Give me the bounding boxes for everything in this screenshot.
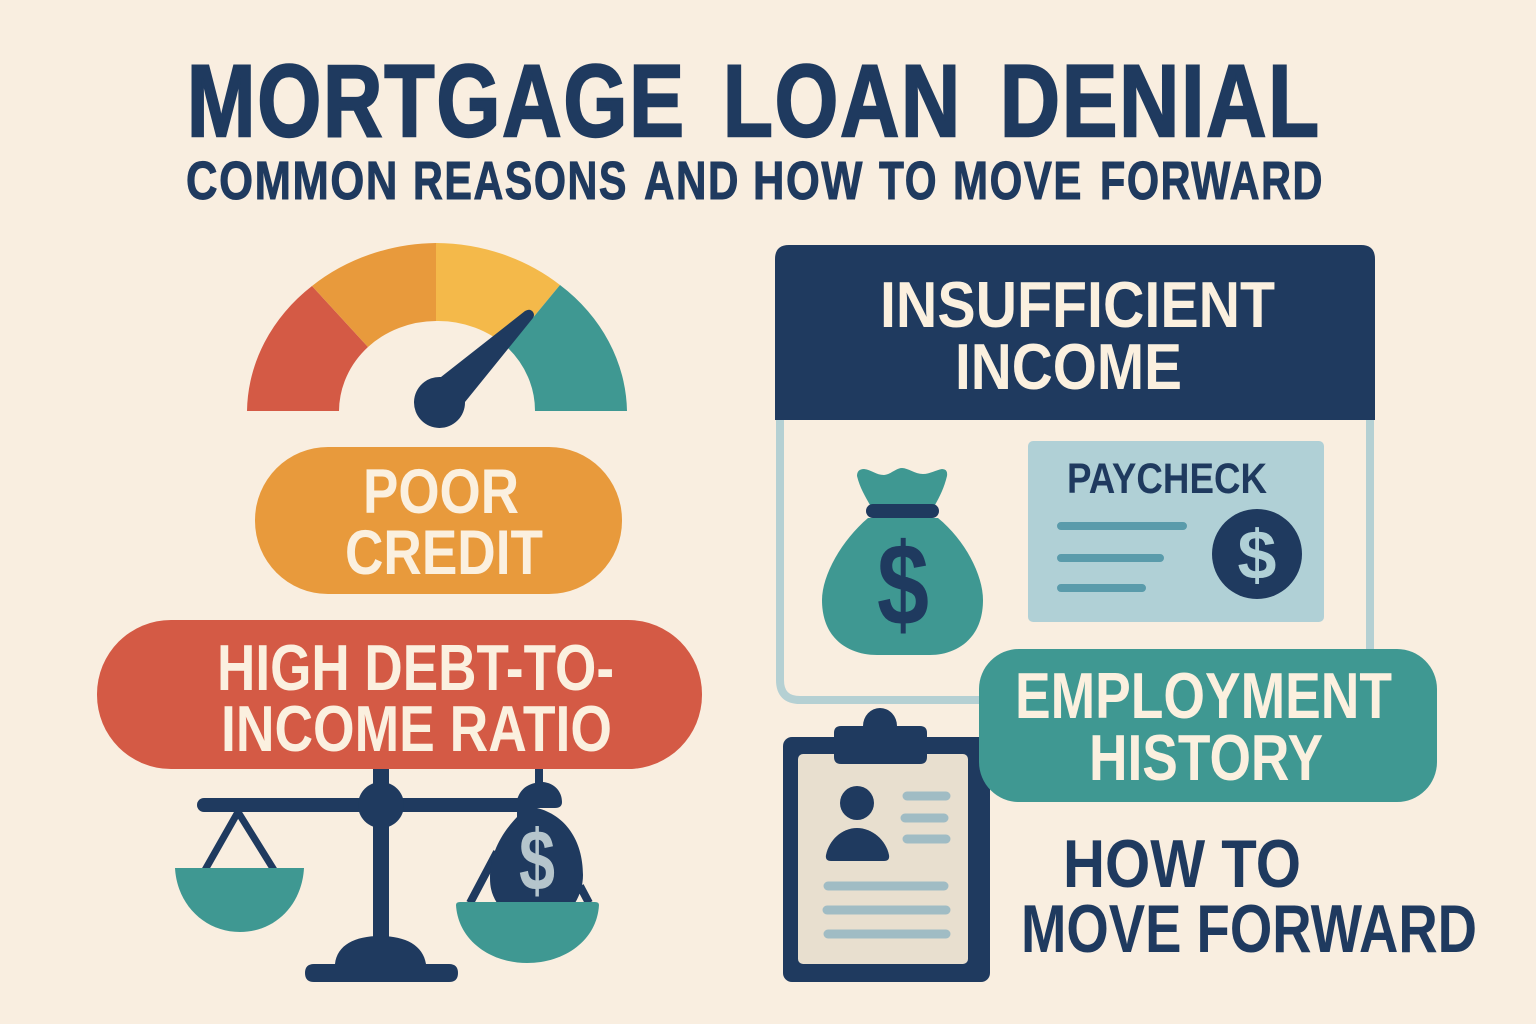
pill: employment history: HISTORY — [1089, 721, 1323, 794]
scale post — [373, 765, 389, 945]
paycheck card: PAYCHECK — [1067, 455, 1267, 503]
pill: high debt-to-income ratio — [97, 620, 702, 769]
left pan — [175, 868, 304, 932]
pill: poor credit: CREDIT — [345, 518, 543, 588]
subtitle: AND — [644, 151, 740, 211]
title — [187, 44, 1321, 158]
subtitle: COMMON — [186, 151, 399, 211]
subtitle: HOW — [753, 151, 864, 211]
title: DENIAL — [1000, 44, 1321, 158]
pill: high debt-to-income ratio: INCOME RATIO — [221, 692, 612, 765]
card header — [775, 245, 1375, 420]
pill: poor credit: POOR — [363, 457, 519, 527]
right pan — [456, 902, 599, 963]
dollar sign: $ — [519, 813, 555, 909]
clipboard board — [783, 737, 990, 982]
panel: insufficient income — [775, 245, 1375, 700]
pill: high debt-to-income ratio: HIGH DEBT-TO- — [217, 631, 614, 704]
scale base — [305, 936, 458, 982]
paycheck card — [1028, 441, 1324, 622]
text: how to move forward — [1021, 826, 1477, 967]
icon: money bag — [822, 468, 983, 655]
title: MORTGAGE — [187, 44, 686, 158]
resume lines — [827, 796, 946, 934]
icon: clipboard with resume — [783, 708, 990, 982]
icon: credit score gauge — [247, 243, 627, 428]
money bag on scale — [490, 765, 583, 903]
left pan strings — [205, 812, 274, 870]
scale hub — [358, 782, 404, 828]
person icon — [826, 786, 889, 861]
subtitle: REASONS — [413, 151, 628, 211]
pill: employment history — [979, 649, 1437, 802]
text: how to move forward: HOW TO — [1063, 826, 1301, 902]
card heading: INSUFFICIENT — [880, 268, 1275, 341]
subtitle: MOVE — [953, 151, 1083, 211]
clip — [834, 708, 927, 764]
title: LOAN — [723, 44, 962, 158]
gauge teal segment — [508, 285, 627, 411]
right pan strings — [470, 852, 589, 903]
pill: employment history: EMPLOYMENT — [1015, 659, 1392, 732]
paycheck card: $ — [1238, 516, 1276, 594]
scale beam — [197, 798, 525, 812]
subtitle — [186, 151, 1324, 211]
subtitle: FORWARD — [1100, 151, 1324, 211]
icon: balance scale with money bag — [175, 765, 599, 982]
gauge red segment — [247, 286, 368, 411]
pill: poor credit — [255, 447, 622, 594]
paper — [798, 754, 968, 964]
card outline — [780, 420, 1370, 700]
gauge needle — [414, 310, 534, 428]
icon: money bag: $ — [877, 519, 929, 650]
gauge yellow segment — [436, 243, 560, 348]
subtitle: TO — [879, 151, 938, 211]
gauge orange segment — [312, 243, 436, 347]
panel: insufficient income: INCOME — [955, 330, 1182, 403]
